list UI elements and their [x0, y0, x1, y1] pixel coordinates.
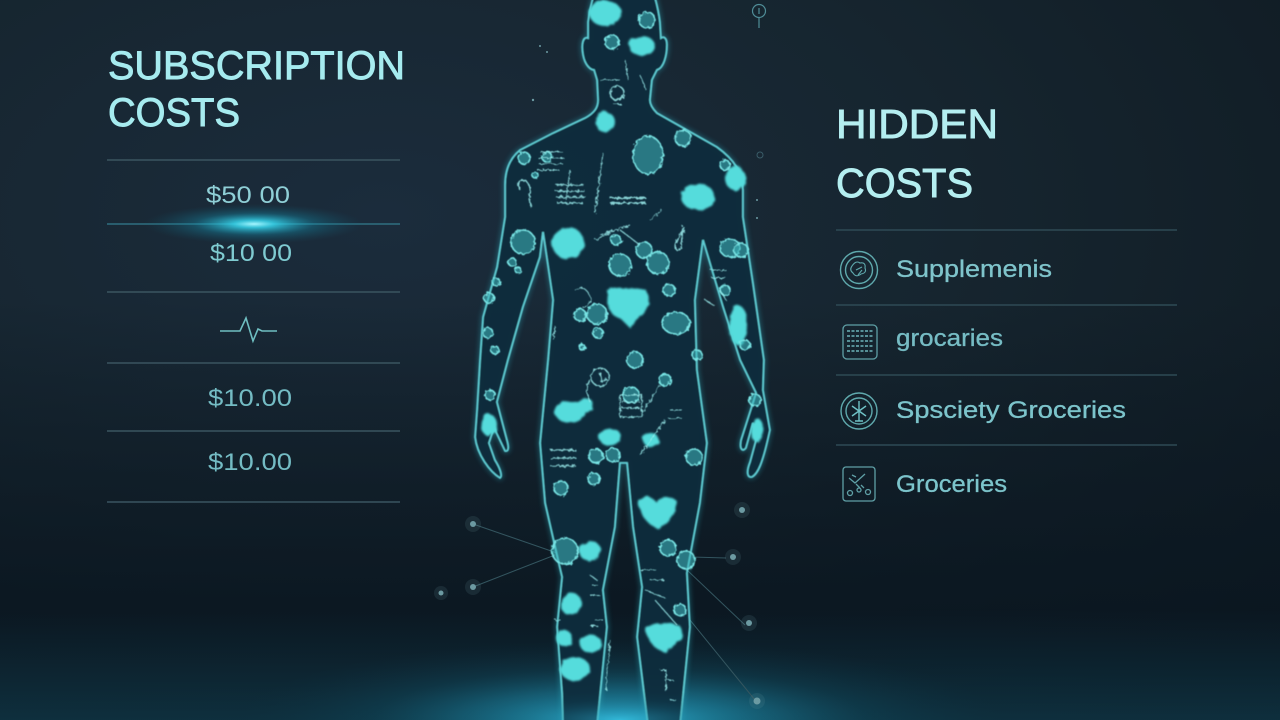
network nodes and connectors: [434, 45, 765, 709]
icon: grocery grid: [843, 325, 877, 359]
icon: pin marker: [752, 4, 766, 28]
body glow: [475, 0, 770, 720]
human body figure: [475, 0, 770, 720]
heading: subscription costs: SUBSCRIPTION: [108, 44, 405, 88]
cost value 1: $50 00: [206, 182, 290, 209]
textured organs: [483, 12, 761, 616]
icon: heartbeat pulse: [220, 318, 277, 341]
row: supplements: [840, 252, 1052, 288]
panel: hidden costs: [836, 101, 1177, 501]
label: supplements: Supplemenis: [896, 256, 1052, 283]
cost value 3: $10.00: [208, 385, 292, 412]
label: grocaries: grocaries: [896, 325, 1003, 352]
label: specialty groceries: Spsciety Groceries: [896, 397, 1126, 424]
body silhouette: [475, 0, 770, 720]
label: groceries: Groceries: [896, 471, 1007, 498]
heading: hidden costs: COSTS: [836, 160, 973, 206]
icon: specialty: [841, 393, 877, 429]
cost value 2: $10 00: [210, 240, 292, 267]
scribbled details: [518, 60, 726, 700]
heading: subscription costs: COSTS: [108, 91, 240, 135]
foot light over legs: [460, 660, 780, 720]
panel: subscription costs: [107, 44, 405, 502]
heading: hidden costs: [836, 101, 998, 206]
heading: subscription costs: [108, 44, 405, 135]
cost value 4: $10.00: [208, 449, 292, 476]
icon: groceries: [843, 467, 875, 501]
row: groceries: [843, 467, 1007, 501]
light flare on divider: [144, 204, 364, 244]
row: grocaries: [843, 325, 1003, 359]
row: specialty groceries: [841, 393, 1126, 429]
floor glow: [240, 560, 1000, 720]
heading: hidden costs: HIDDEN: [836, 101, 998, 147]
dense organs and solid blobs: [481, 0, 763, 681]
icon: supplements: [840, 252, 878, 288]
